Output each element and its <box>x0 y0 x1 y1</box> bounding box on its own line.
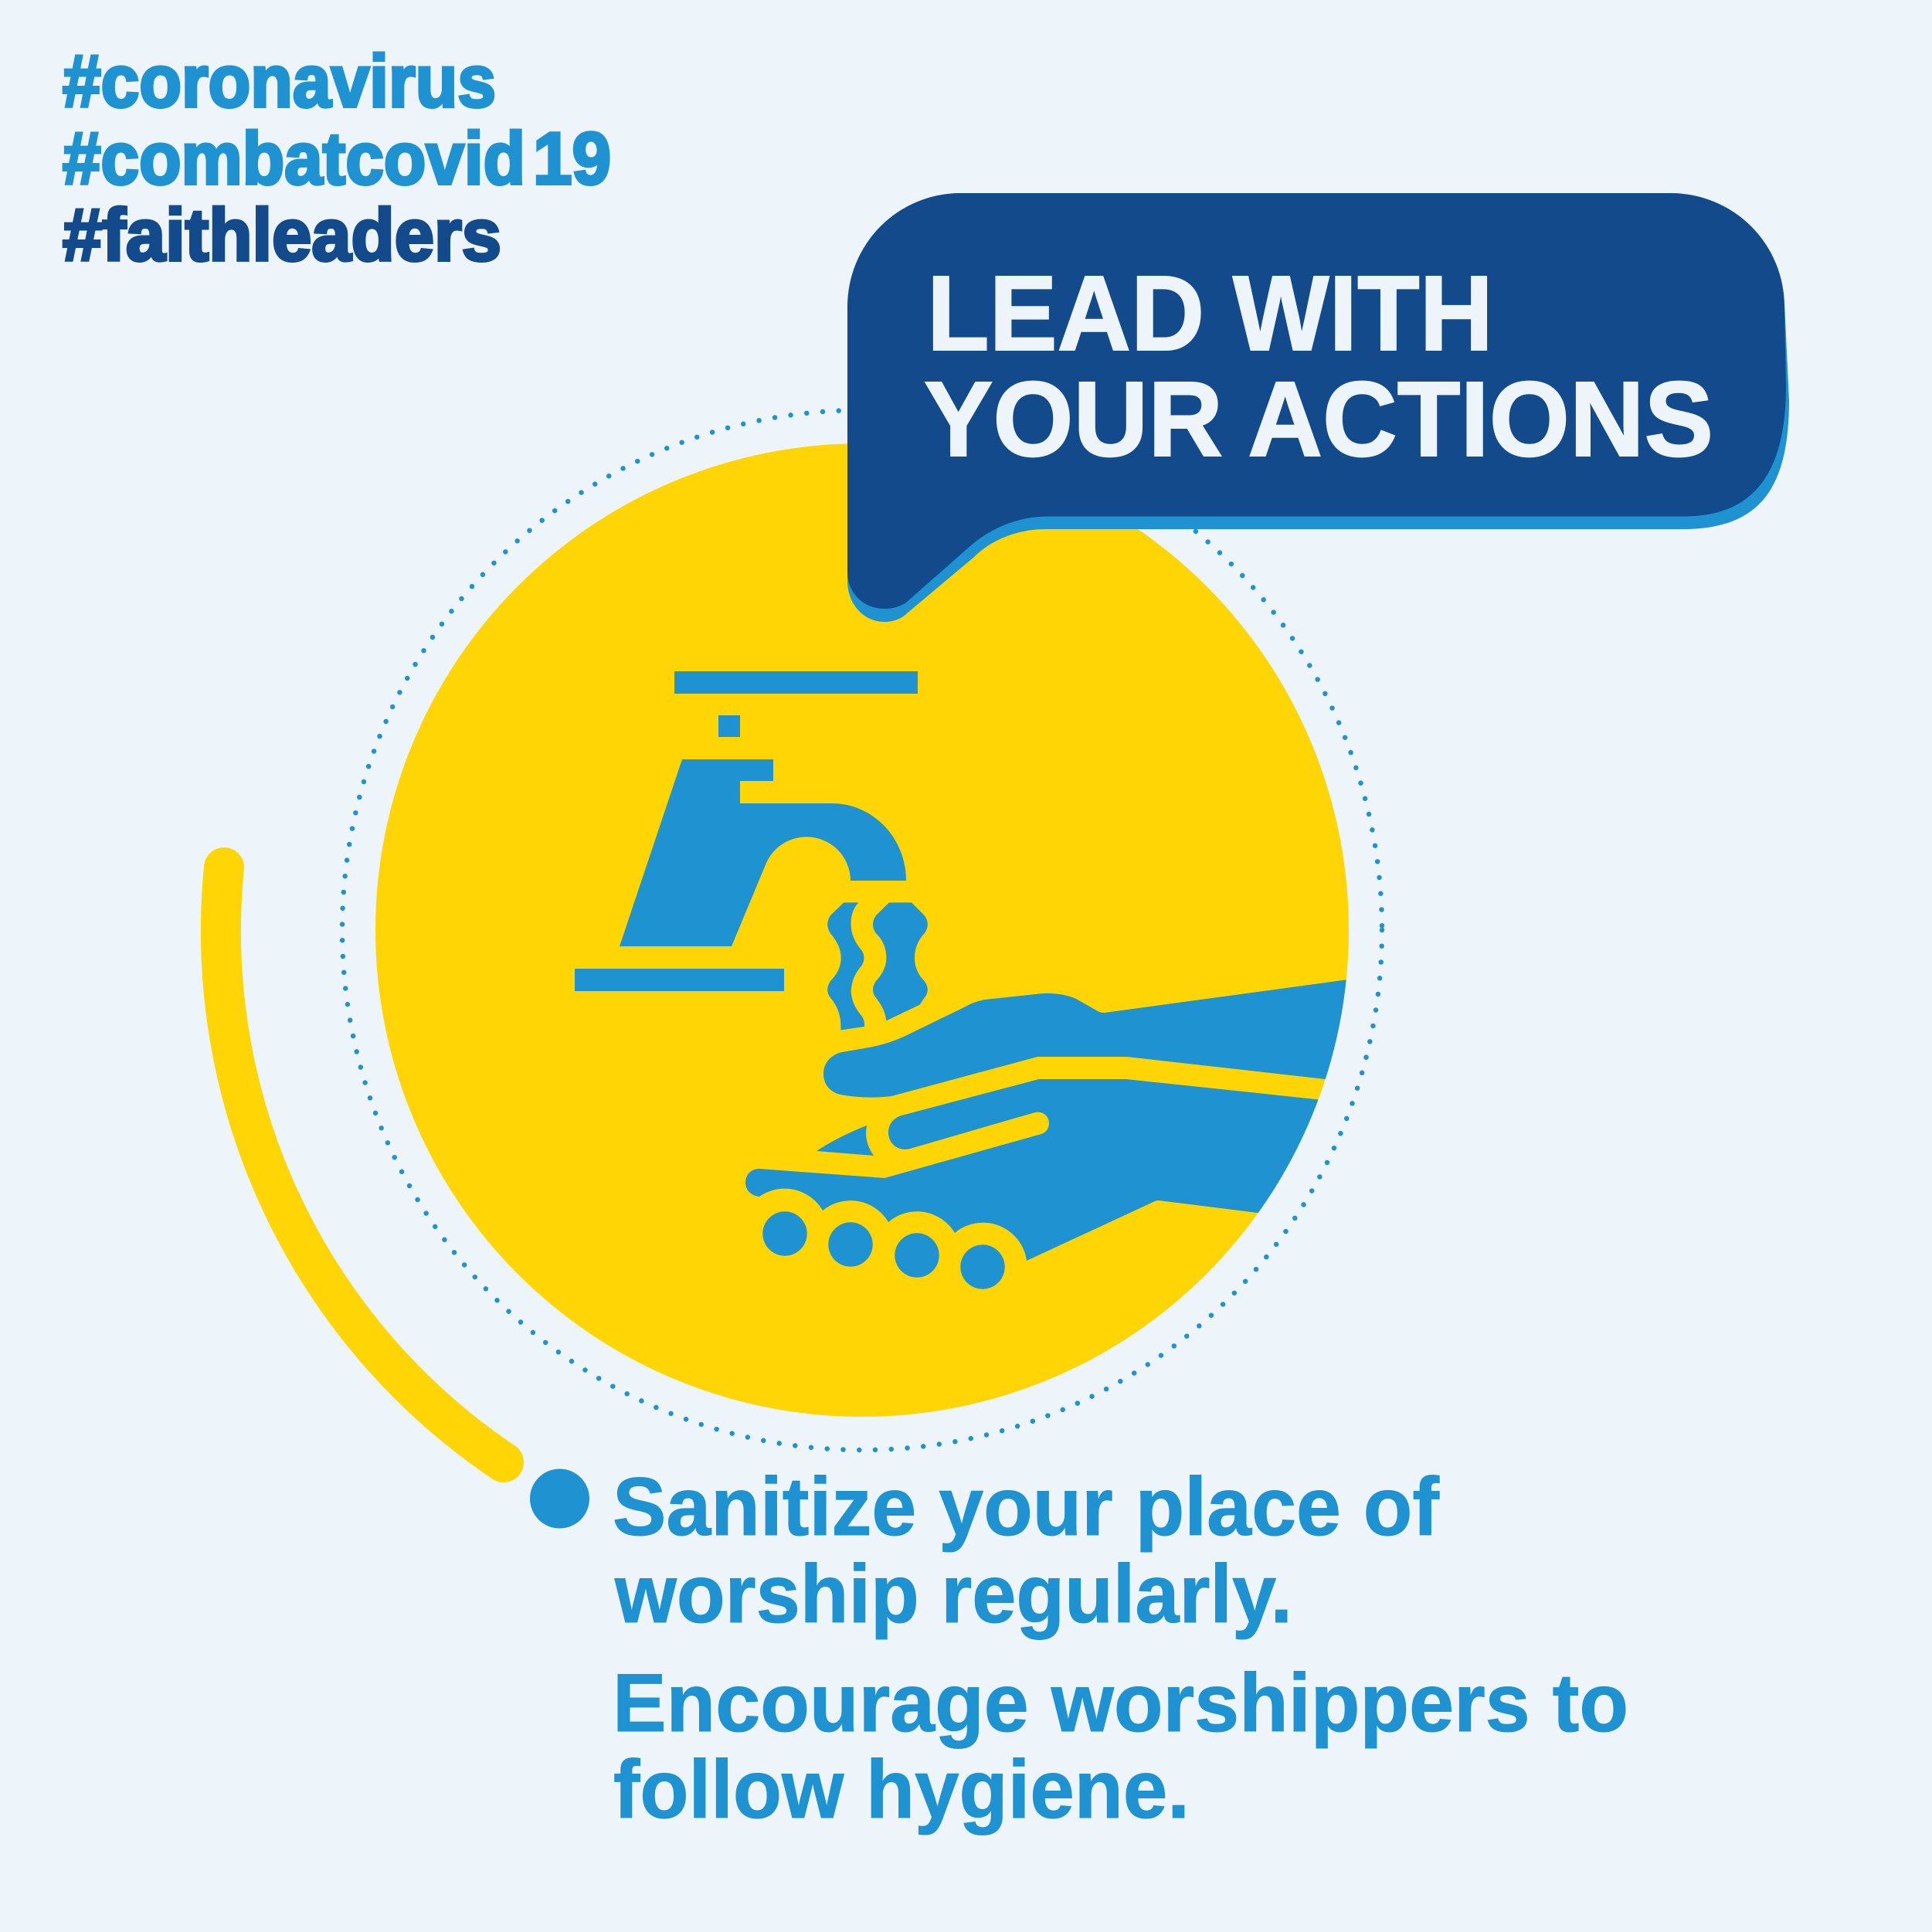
thumb sliver <box>817 1126 874 1156</box>
bubble shadow <box>847 303 1789 622</box>
faucet handle bar <box>674 671 918 694</box>
heading line 2: YOUR ACTIONS <box>924 360 1713 479</box>
icon: faucet <box>575 671 918 991</box>
lower hand <box>745 1079 1360 1261</box>
bullet dot <box>530 1469 589 1528</box>
icon: running water <box>827 902 928 1030</box>
hashtag: coronavirus: #coronavirus <box>63 40 496 123</box>
dotted ring <box>342 410 1382 1450</box>
hashtags <box>63 40 611 277</box>
text line: sanitize: Sanitize your place of <box>613 1460 1439 1553</box>
faucet base <box>575 969 784 991</box>
yellow arc accent <box>221 868 504 1462</box>
text line: encourage: Encourage worshippers to <box>613 1656 1628 1749</box>
speech bubble <box>847 193 1789 622</box>
bubble body <box>847 193 1786 609</box>
hashtag: faithleaders: #faithleaders <box>63 194 501 277</box>
hashtag: digits 19: 19 <box>533 117 611 200</box>
hashtag: combatcovid: #combatcovid <box>63 117 525 200</box>
fingertip 1 <box>762 1211 807 1256</box>
water stream right <box>873 902 928 1020</box>
fingertip 2 <box>828 1222 873 1267</box>
water stream left <box>827 902 864 1030</box>
text line: worship: worship regularly. <box>614 1547 1292 1640</box>
fingertip 4 <box>960 1244 1005 1289</box>
yellow circle <box>375 443 1349 1417</box>
faucet body <box>620 759 906 946</box>
upper hand <box>823 978 1360 1098</box>
body text <box>613 1460 1628 1835</box>
icon: washing hands <box>745 978 1360 1289</box>
text line: follow hygiene: follow hygiene. <box>613 1743 1190 1835</box>
faucet handle stem <box>718 715 740 737</box>
fingertip 3 <box>895 1233 939 1278</box>
heading line 1: LEAD WITH <box>927 254 1493 373</box>
